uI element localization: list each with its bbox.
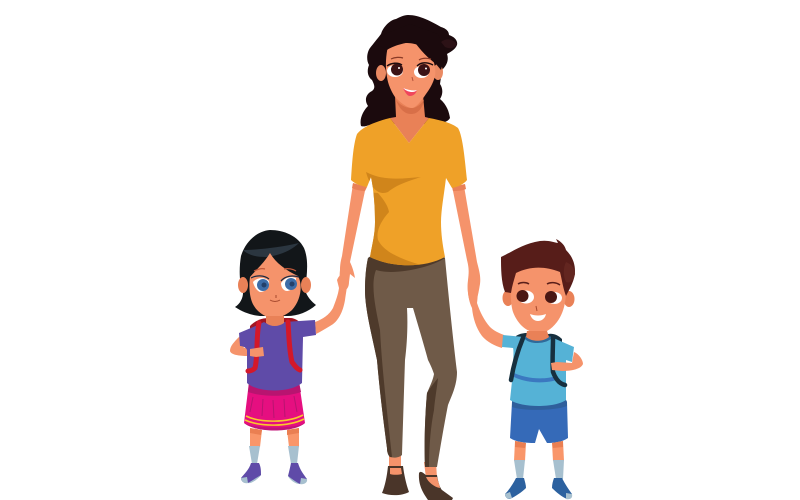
girl eyes <box>251 269 299 292</box>
girl shirt <box>239 320 316 390</box>
girl mouth and nose <box>270 295 280 302</box>
mother shirt <box>351 118 467 266</box>
mother ears <box>376 64 443 81</box>
boy shirt hem shadow <box>512 396 567 410</box>
mother right shoe <box>419 472 453 500</box>
boy backpack <box>516 333 562 366</box>
girl socks <box>249 446 299 464</box>
girl neck <box>266 316 284 326</box>
figure: girl <box>230 230 347 484</box>
figure: boy <box>468 239 583 499</box>
boy hair <box>501 239 575 296</box>
boy shorts <box>510 396 568 443</box>
girl raised arm <box>315 274 347 334</box>
girl hair highlight <box>243 243 299 257</box>
girl legs <box>250 428 299 447</box>
mother sleeve shadows <box>352 183 466 191</box>
boy shirt stripe <box>512 372 557 382</box>
girl backpack straps <box>248 322 300 371</box>
mother pants <box>365 254 457 467</box>
mother eyes <box>387 57 433 78</box>
boy backpack straps <box>511 338 565 385</box>
girl shoes <box>241 463 307 484</box>
boy hand and arm <box>551 352 583 371</box>
boy legs <box>514 441 564 461</box>
girl backpack <box>250 318 303 362</box>
boy socks <box>514 460 564 479</box>
illustration: mother and two children <box>230 15 583 500</box>
boy shirt <box>502 335 574 406</box>
mother ankles <box>389 452 437 478</box>
girl hair <box>235 230 316 316</box>
girl ears <box>238 277 311 293</box>
mother chin shadow <box>396 100 424 114</box>
girl skirt <box>244 382 305 430</box>
mother left arm <box>340 184 366 290</box>
boy shirt collar <box>525 337 551 342</box>
mother right arm <box>452 186 480 305</box>
mother hair back <box>361 15 457 126</box>
mother left shoe <box>382 466 409 495</box>
mother mouth <box>403 77 417 96</box>
figure: mother <box>340 15 480 500</box>
boy neck <box>526 331 549 341</box>
girl hand <box>250 347 264 357</box>
mother face <box>386 43 435 108</box>
boy ears <box>502 290 574 307</box>
boy eyes <box>516 282 562 304</box>
mother neck and chest <box>390 95 429 143</box>
girl left sleeve arm <box>230 336 264 357</box>
boy face <box>511 264 566 333</box>
boy shoes <box>505 478 572 499</box>
boy raised arm <box>468 280 504 348</box>
girl face <box>249 253 301 318</box>
mother fringe <box>378 24 446 70</box>
boy mouth <box>530 306 546 321</box>
